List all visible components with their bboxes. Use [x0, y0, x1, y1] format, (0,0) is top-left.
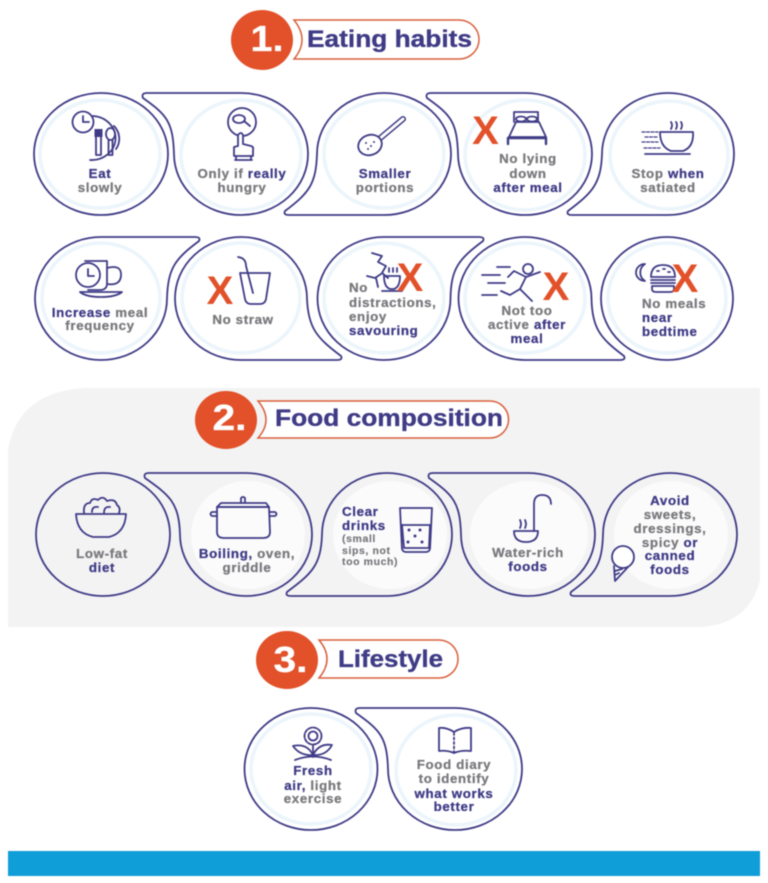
label: boiling, oven, griddle: Boiling, oven,	[199, 546, 295, 561]
label: low-fat diet: diet	[89, 560, 115, 575]
label: not too active after meal: meal	[511, 331, 543, 346]
label: clear drinks: sips, not	[342, 545, 391, 557]
label: boiling, oven, griddle	[199, 546, 295, 575]
heading 1: eating habits: Eating habits	[307, 26, 472, 53]
label: fresh air, light exercise: air, light	[284, 778, 342, 793]
panel: low-fat diet	[36, 473, 170, 596]
label: clear drinks: drinks	[342, 518, 386, 533]
panel: stop when satiated	[568, 93, 734, 215]
label: water-rich foods	[492, 545, 564, 574]
label: no distractions, enjoy savouring: enjoy	[349, 309, 387, 324]
heading 1: eating habits	[231, 10, 479, 70]
label: smaller portions: portions	[356, 180, 414, 195]
panel: boiling, oven, griddle	[144, 473, 312, 596]
label: no lying down after meal: No lying	[499, 151, 557, 166]
panel: avoid sweets, dressings, spicy or canned foods	[570, 473, 737, 596]
heading 2: food composition	[195, 391, 508, 449]
icon: cross: X	[207, 269, 234, 313]
label: no distractions, enjoy savouring: savouring	[349, 323, 418, 338]
label: eat slowly: Eat	[89, 166, 111, 181]
label: boiling, oven, griddle: griddle	[223, 560, 271, 575]
label: only if really hungry	[198, 166, 286, 195]
label: clear drinks: too much)	[342, 556, 398, 568]
label: increase meal frequency	[52, 305, 148, 333]
panel: water-rich foods	[428, 473, 595, 596]
label: fresh air, light exercise	[284, 763, 342, 806]
icon: hand pressing food button	[228, 108, 256, 160]
icon: open book	[439, 728, 471, 753]
label: no distractions, enjoy savouring: No	[349, 280, 368, 295]
label: no meals near bedtime: bedtime	[642, 324, 698, 339]
label: avoid sweets, dressings, spicy or canned foods: dressings,	[633, 521, 707, 536]
label: eat slowly	[78, 166, 122, 195]
icon: runner	[482, 264, 540, 301]
icon: cross: X	[543, 265, 570, 309]
label: no lying down after meal: after meal	[493, 180, 563, 195]
icon: glass with straw	[238, 257, 270, 304]
label: no distractions, enjoy savouring: distractions,	[349, 295, 437, 310]
panel: fresh air, light exercise	[244, 708, 378, 830]
panel: increase meal frequency	[35, 237, 200, 360]
icon: cross: X	[672, 257, 699, 301]
label: water-rich foods: Water-rich	[492, 545, 564, 560]
label: avoid sweets, dressings, spicy or canned foods: sweets,	[644, 507, 696, 522]
icon: salad bowl	[76, 498, 126, 537]
label: no meals near bedtime: near	[642, 310, 673, 325]
heading 1: eating habits: 1.	[250, 18, 284, 59]
label: avoid sweets, dressings, spicy or canned foods: foods	[650, 562, 690, 577]
icon: glass of water	[400, 508, 432, 552]
label: low-fat diet	[76, 546, 128, 575]
label: avoid sweets, dressings, spicy or canned foods	[633, 493, 707, 577]
label: food diary to identify what works better: to identify	[419, 771, 489, 786]
label: increase meal frequency: Increase meal	[52, 305, 148, 320]
icon: steaming bowl	[642, 122, 693, 154]
label: clear drinks: (small	[342, 533, 376, 545]
label: food diary to identify what works better: what works	[414, 786, 493, 801]
icon: flower	[293, 728, 332, 760]
panel: smaller portions	[284, 93, 451, 215]
panel: no lying down after meal	[426, 93, 592, 215]
label: fresh air, light exercise: Fresh	[293, 763, 333, 778]
panel: food composition background	[8, 388, 760, 627]
panel: no straw	[175, 237, 342, 360]
footer bar	[8, 851, 760, 876]
label: avoid sweets, dressings, spicy or canned foods: spicy or	[642, 535, 698, 550]
label: smaller portions: Smaller	[359, 166, 411, 181]
label: avoid sweets, dressings, spicy or canned foods: canned	[645, 548, 695, 563]
label: clear drinks	[342, 504, 398, 568]
label: stop when satiated: satiated	[640, 180, 696, 195]
label: fresh air, light exercise: exercise	[284, 791, 342, 806]
label: stop when satiated: Stop when	[631, 166, 705, 181]
label: no straw: No straw	[212, 312, 274, 327]
label: low-fat diet: Low-fat	[76, 546, 128, 561]
icon: cross: X	[472, 109, 499, 153]
label: not too active after meal: active after	[488, 317, 566, 332]
panel: no distractions, enjoy savouring	[318, 237, 484, 360]
icon: cooking pot	[210, 497, 276, 538]
label: food diary to identify what works better: better	[434, 799, 474, 814]
icon: ladle	[514, 495, 551, 542]
heading 3: lifestyle: Lifestyle	[338, 646, 443, 673]
label: not too active after meal: Not too	[501, 303, 553, 318]
panel: no meals near bedtime	[601, 237, 733, 360]
heading 2: food composition: Food composition	[275, 405, 503, 432]
panel: food diary	[356, 708, 522, 830]
label: clear drinks: Clear	[342, 504, 379, 519]
label: stop when satiated	[631, 166, 705, 195]
icon: moon and burger	[636, 264, 675, 292]
panel: only if really hungry	[142, 93, 308, 215]
panel: not too active after meal	[459, 237, 624, 360]
heading 3: lifestyle	[256, 631, 458, 689]
icon: cross: X	[397, 256, 424, 300]
icon: distraction and cup	[367, 253, 402, 291]
icon: ice cream cone	[612, 546, 634, 581]
label: no meals near bedtime	[642, 296, 706, 339]
label: no meals near bedtime: No meals	[642, 296, 706, 311]
heading 3: lifestyle: 3.	[274, 639, 308, 680]
heading 2: food composition: 2.	[212, 397, 246, 438]
label: food diary to identify what works better: Food diary	[417, 757, 491, 772]
panel: eat slowly	[34, 93, 168, 215]
icon: cup and clock	[76, 261, 122, 297]
panel: clear drinks	[286, 473, 452, 596]
label: avoid sweets, dressings, spicy or canned foods: Avoid	[650, 493, 690, 508]
label: only if really hungry: hungry	[218, 180, 266, 195]
label: food diary to identify what works better	[414, 757, 493, 814]
icon: bed	[508, 112, 546, 144]
icon: clock and cutlery on plate	[72, 112, 119, 160]
icon: serving spoon	[355, 119, 403, 159]
label: no lying down after meal	[493, 151, 563, 195]
label: only if really hungry: Only if really	[198, 166, 286, 181]
label: no distractions, enjoy savouring	[349, 280, 437, 338]
label: no lying down after meal: down	[509, 166, 547, 181]
label: water-rich foods: foods	[508, 559, 548, 574]
label: eat slowly: slowly	[78, 180, 122, 195]
label: smaller portions	[356, 166, 414, 195]
label: increase meal frequency: frequency	[65, 318, 135, 333]
label: not too active after meal	[488, 303, 566, 346]
